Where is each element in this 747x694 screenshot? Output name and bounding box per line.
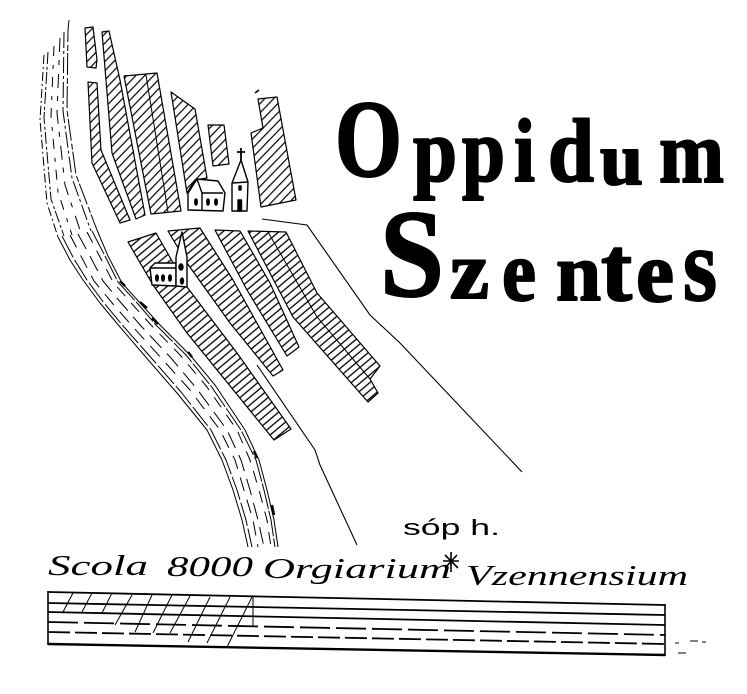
block: fourth strip <box>171 92 207 193</box>
star mark <box>443 552 459 572</box>
road: east <box>262 219 522 472</box>
river <box>40 20 278 547</box>
specks right of bar <box>675 641 706 653</box>
title line: Oppidum: d <box>548 102 594 201</box>
block: narrow left strip top <box>85 27 97 68</box>
horizontal rules <box>48 592 665 655</box>
title line: Oppidum: m <box>659 105 724 202</box>
title line: Oppidum <box>335 78 724 202</box>
mark above right block <box>255 90 259 93</box>
nave <box>188 179 225 211</box>
title <box>335 78 724 324</box>
title line: Oppidum: O <box>335 78 402 200</box>
title line: Szentes: e <box>636 224 674 320</box>
end posts <box>48 591 665 656</box>
title line: Szentes <box>380 186 717 324</box>
word: Orgiarium: Orgiarium <box>263 553 451 585</box>
title line: Oppidum: u <box>600 119 643 201</box>
word: 8000: 8000 <box>167 551 254 583</box>
block: right stepped <box>251 97 296 207</box>
title line: Oppidum: p <box>413 102 457 201</box>
church lower <box>150 232 187 287</box>
title line: Oppidum: i <box>514 102 535 201</box>
title line: Oppidum: p <box>462 102 505 201</box>
block: small rectangle <box>208 125 229 166</box>
scale caption <box>48 550 688 592</box>
block: right double <box>248 231 380 402</box>
diagonal grid <box>63 593 252 647</box>
word: Scola: Scola <box>48 550 148 582</box>
block: long left <box>128 233 291 440</box>
road: south <box>257 365 357 545</box>
block: second strip <box>102 31 145 219</box>
title line: Szentes: n <box>556 227 601 318</box>
upper town blocks <box>85 27 296 223</box>
nave <box>150 263 176 286</box>
block: second <box>168 228 283 376</box>
title line: Szentes: t <box>601 218 632 320</box>
lower town blocks <box>128 228 380 440</box>
title line: Szentes: e <box>502 223 536 319</box>
scale bar <box>48 591 706 656</box>
title line: Szentes: S <box>380 186 444 324</box>
steeple <box>176 232 187 287</box>
title line: Szentes: z <box>450 225 489 316</box>
handwritten note: sóp h. <box>403 515 500 540</box>
block: narrow left strip bottom <box>88 82 130 223</box>
title line: Szentes: s <box>683 208 717 323</box>
block: third <box>215 230 299 356</box>
word: Vzennensium: Vzennensium <box>466 560 688 592</box>
church upper <box>188 148 248 211</box>
steeple <box>232 148 248 211</box>
block: double strip <box>124 73 181 214</box>
